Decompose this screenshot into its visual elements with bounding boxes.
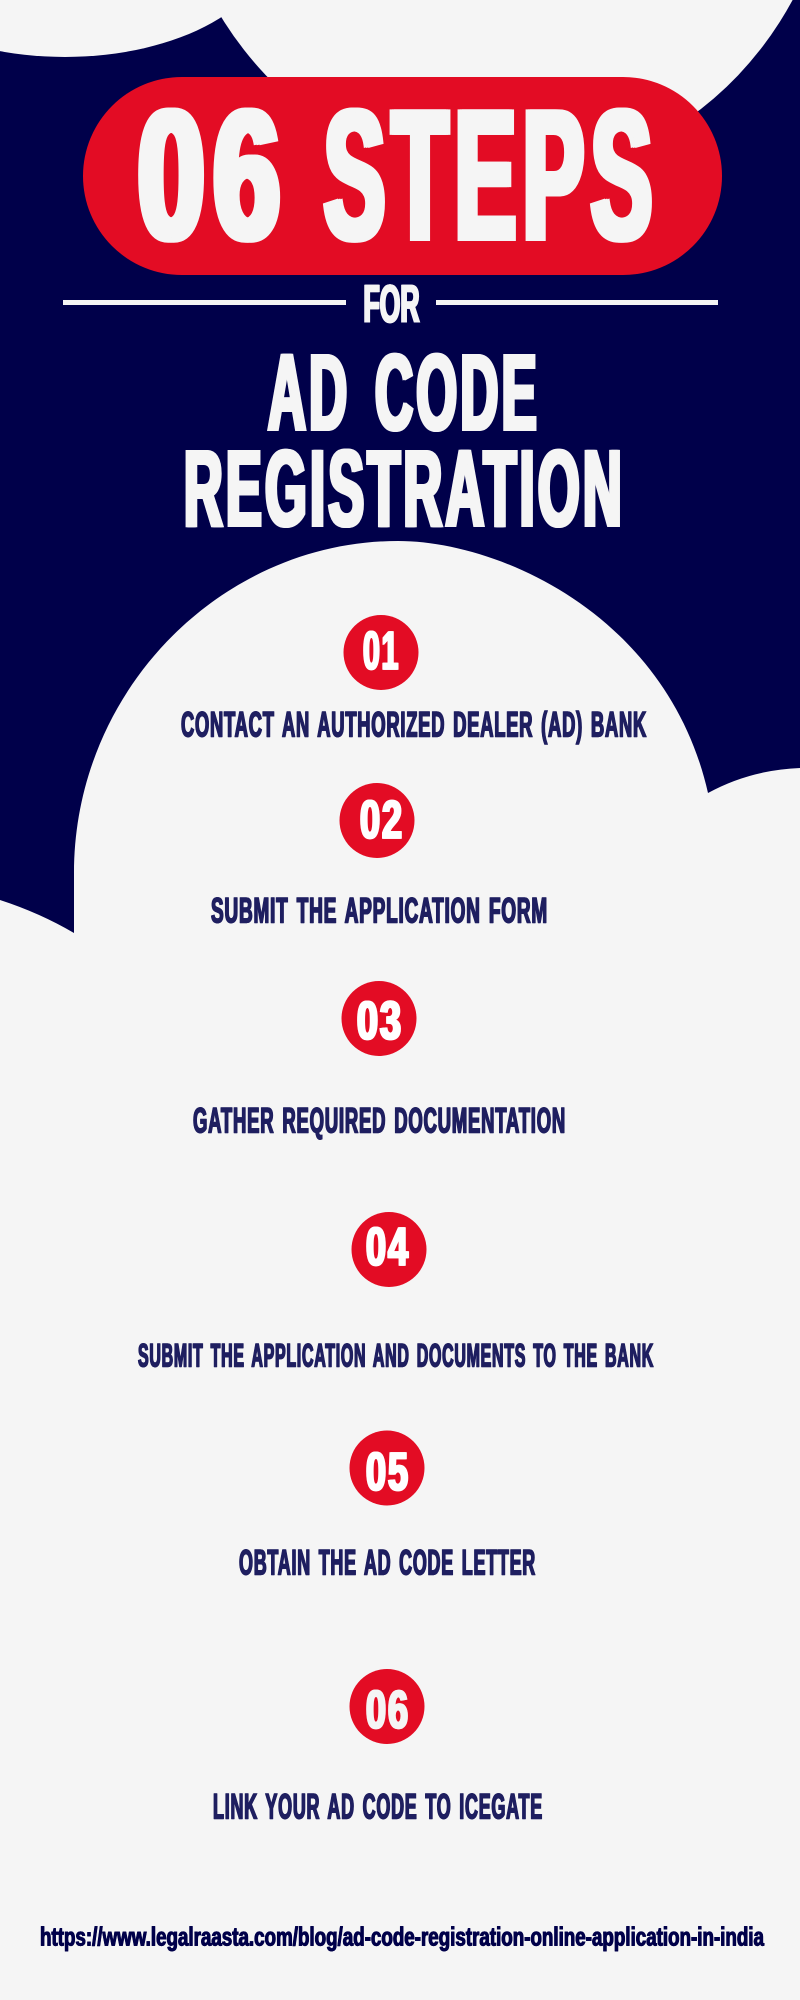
step 2 badge	[340, 783, 414, 858]
step 1 badge	[344, 615, 418, 690]
light arch content background	[0, 541, 800, 2000]
subtitle: for, with rules	[63, 275, 718, 334]
step 5 badge: 05	[366, 1442, 410, 1502]
navy header background	[0, 0, 800, 1000]
step 6 badge	[350, 1669, 424, 1744]
step 4 badge	[352, 1212, 426, 1287]
title: 06 steps: 06	[138, 72, 289, 278]
step 2	[211, 783, 548, 930]
step 5 badge	[350, 1430, 424, 1506]
step 5	[239, 1430, 536, 1582]
step 4 badge: 04	[366, 1217, 410, 1277]
step 6	[213, 1669, 543, 1826]
step 2 badge: 02	[360, 790, 404, 850]
top-right light ellipse	[168, 0, 800, 178]
step 3	[193, 981, 566, 1140]
step 1 badge: 01	[363, 621, 400, 681]
step 3 badge: 03	[357, 991, 403, 1051]
step 3 badge	[342, 981, 416, 1056]
subtitle: for, with rules: FOR	[364, 275, 420, 334]
top-left light ellipse	[0, 0, 273, 57]
title pill	[83, 72, 722, 278]
title: 06 steps	[138, 72, 659, 278]
step 6 badge: 06	[366, 1680, 410, 1740]
step 1	[181, 615, 647, 744]
step 4	[138, 1212, 654, 1373]
heading: ad code registration	[184, 332, 625, 548]
